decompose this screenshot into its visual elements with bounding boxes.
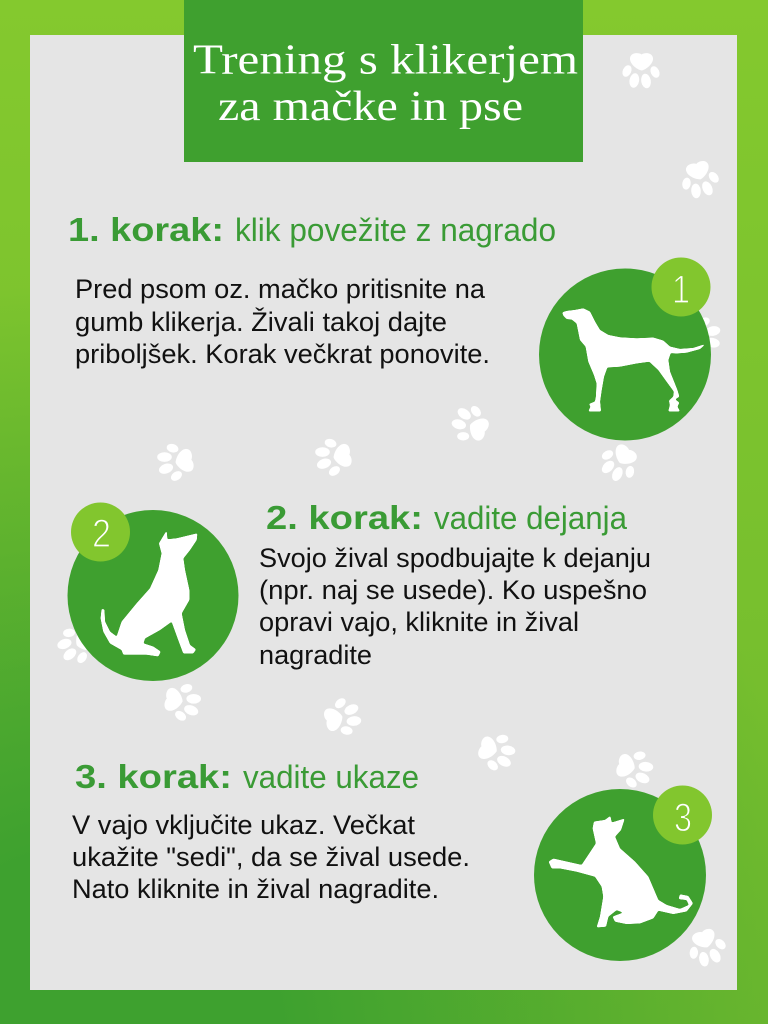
step 3 text: ukažite "sedi", da se žival usede. <box>72 842 470 872</box>
step 3 text <box>72 810 470 904</box>
step 2 icon: sitting dog in circle with badge <box>68 502 238 681</box>
title block <box>184 0 583 162</box>
step 1 icon: standing dog in circle with badge <box>539 258 711 440</box>
step 1 icon: standing dog in circle with badge: 1 <box>672 268 690 312</box>
step 2 heading: vadite dejanja <box>434 500 627 536</box>
step 3 icon: cat in circle with badge: 3 <box>674 796 692 840</box>
step 2 heading: 2. korak: <box>266 499 423 536</box>
decorative paw prints <box>50 53 732 972</box>
step 3 heading: vadite ukaze <box>243 759 419 795</box>
step 2 text: (npr. naj se usede). Ko uspešno <box>259 575 647 605</box>
step 2 heading <box>266 499 627 536</box>
step 3 icon: cat in circle with badge <box>534 786 712 961</box>
step 2 icon: sitting dog in circle with badge: 2 <box>92 512 111 556</box>
step 2 text <box>259 543 651 670</box>
step 1 text: Pred psom oz. mačko pritisnite na <box>75 274 486 304</box>
step 3 text: Nato kliknite in žival nagradite. <box>72 874 439 904</box>
step 1 text: priboljšek. Korak večkrat ponovite. <box>75 339 490 369</box>
step 3 heading <box>75 758 419 795</box>
step 1 text <box>75 274 490 369</box>
step 2 text: opravi vajo, kliknite in žival <box>259 607 579 637</box>
step 1 heading: klik povežite z nagrado <box>235 212 556 248</box>
title block: Trening s klikerjem <box>193 38 578 84</box>
step 1 text: gumb klikerja. Živali takoj dajte <box>75 306 447 337</box>
step 2 text: Svojo žival spodbujajte k dejanju <box>259 543 651 573</box>
step 1 heading: 1. korak: <box>68 211 224 248</box>
step 3 text: V vajo vključite ukaz. Večkat <box>72 810 415 840</box>
step 2 text: nagradite <box>259 640 372 670</box>
step 1 heading <box>68 211 556 248</box>
step 3 heading: 3. korak: <box>75 758 232 795</box>
title block: za mačke in pse <box>218 84 523 130</box>
